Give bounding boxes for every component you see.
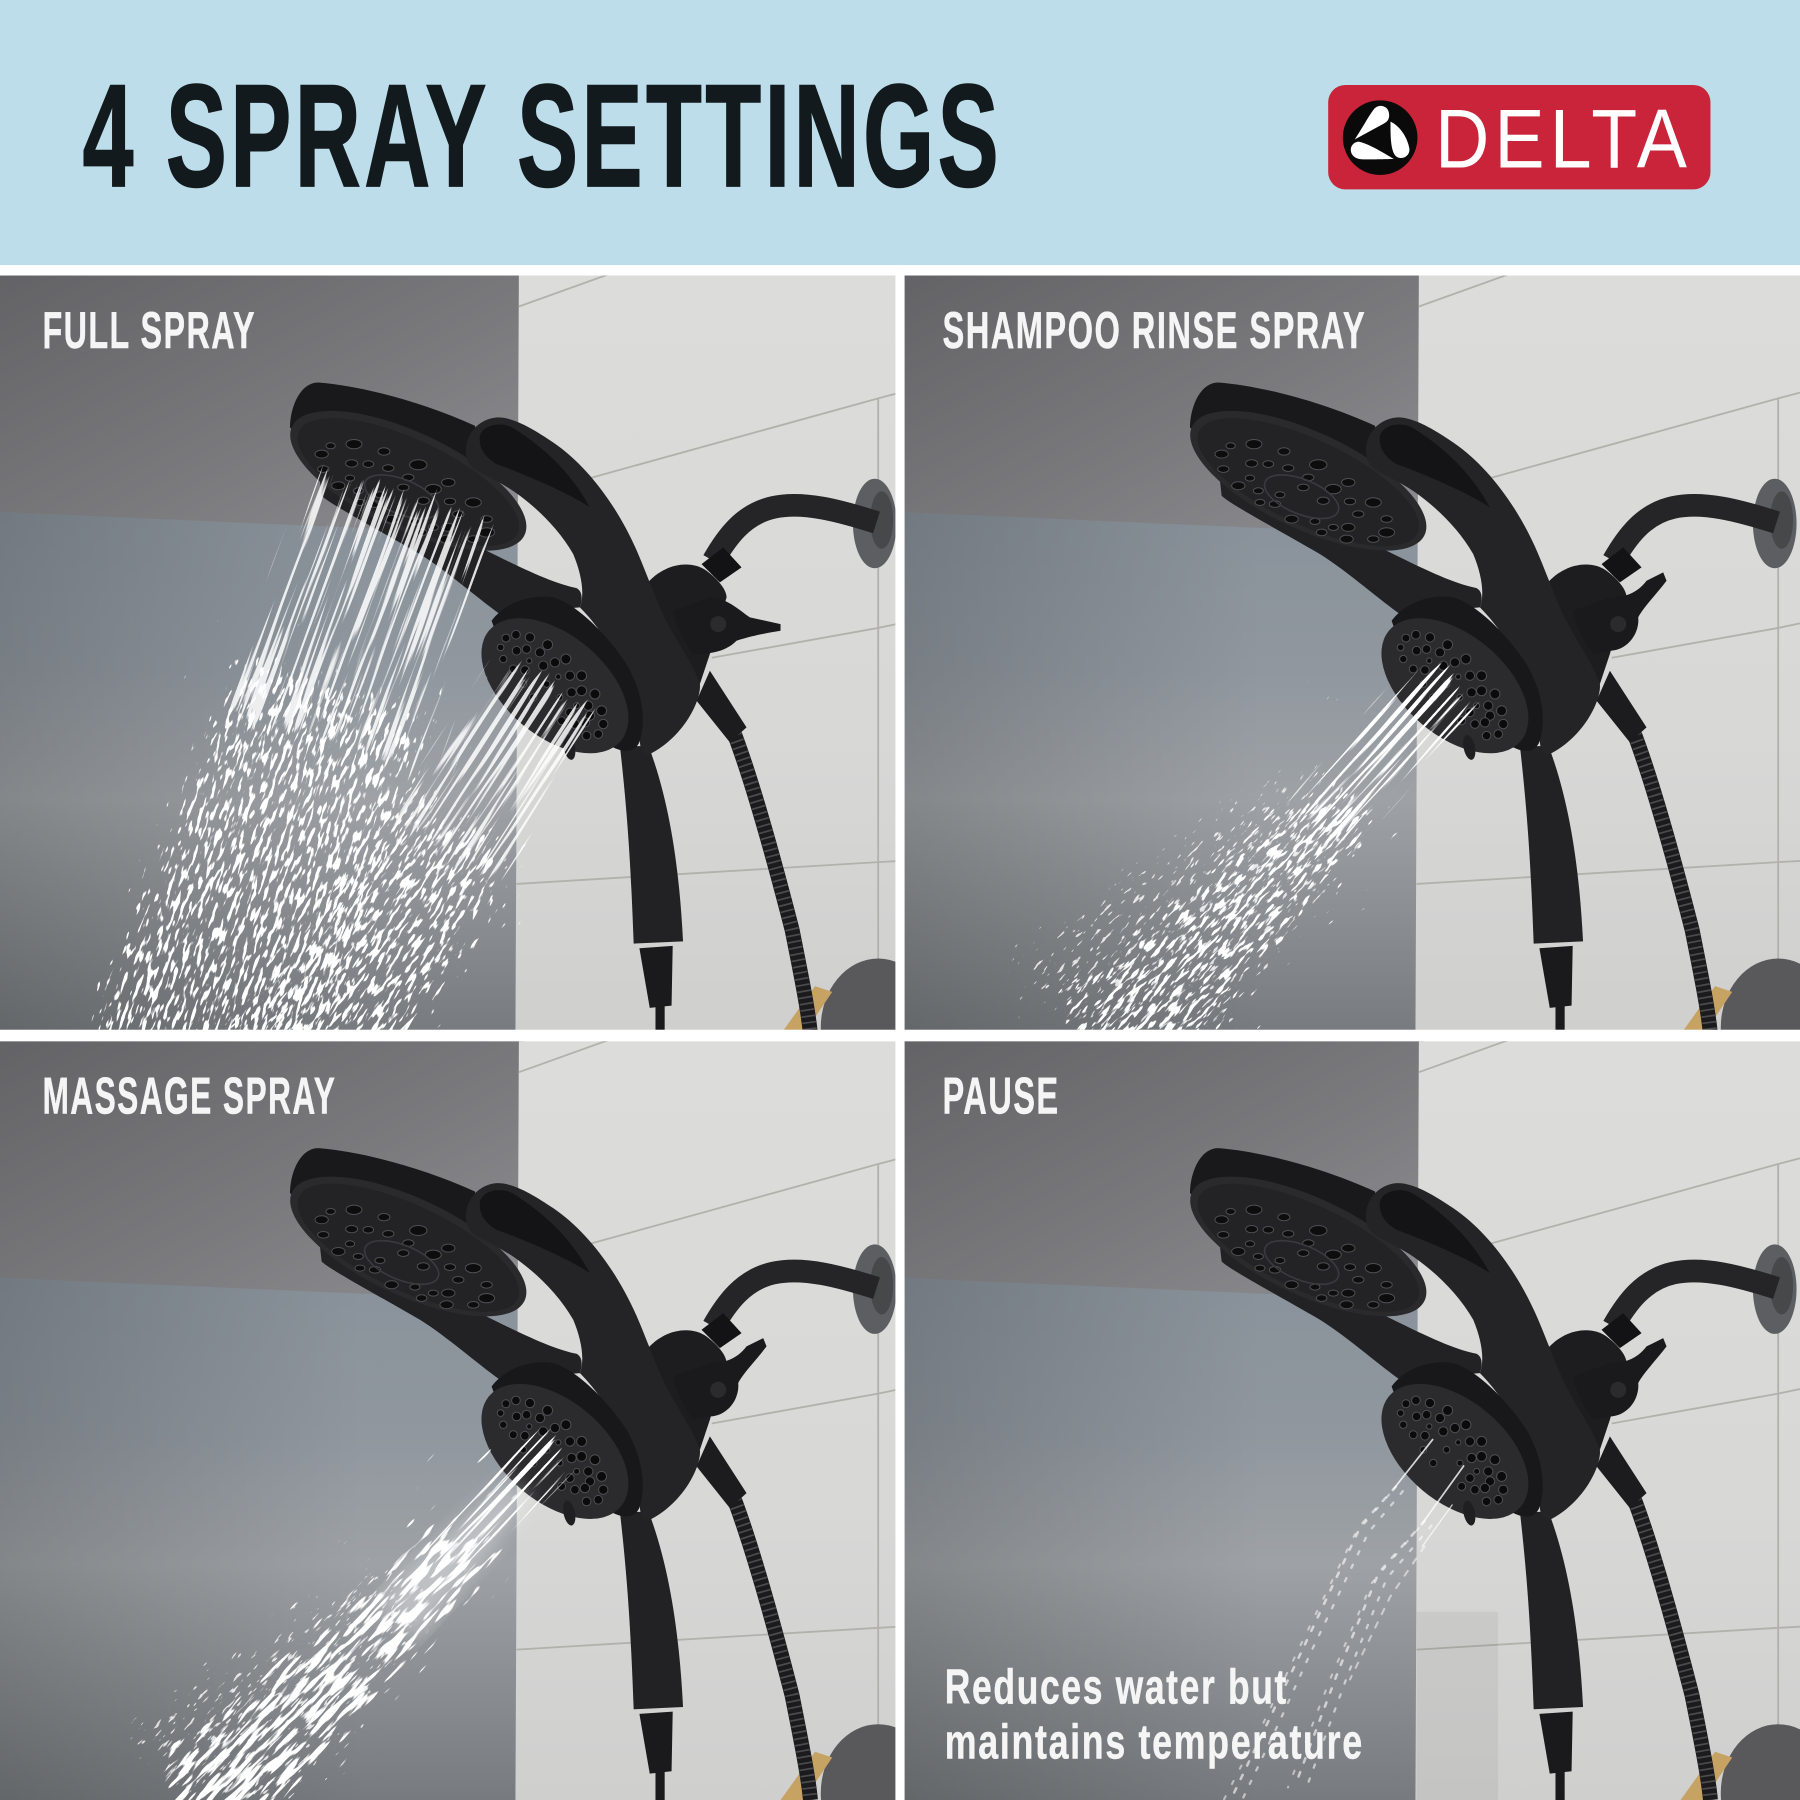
panel label: FULL SPRAY bbox=[42, 301, 256, 359]
diverter lever pointing up bbox=[1610, 1338, 1666, 1416]
water jet bbox=[1008, 662, 1480, 1030]
water spray from hand shower bbox=[221, 659, 596, 1030]
logo wordmark: DELTA bbox=[1435, 92, 1692, 186]
lower tile shadow bbox=[1417, 1612, 1498, 1800]
diverter lever pointing right bbox=[710, 601, 781, 653]
panel: pause bbox=[900, 1040, 1800, 1800]
panel label: SHAMPOO RINSE SPRAY bbox=[942, 301, 1366, 359]
shower fixture scene bbox=[900, 1040, 1800, 1800]
reduced water trickle bbox=[1224, 1440, 1464, 1800]
shower fixture scene bbox=[0, 276, 896, 1030]
logo: Delta bbox=[1328, 85, 1710, 189]
diverter lever pointing up bbox=[710, 1338, 766, 1416]
header band bbox=[0, 0, 1800, 265]
caption: Reduces water but bbox=[945, 1660, 1288, 1715]
panel: shampoo rinse spray bbox=[904, 276, 1800, 1030]
diverter lever pointing up bbox=[1610, 572, 1666, 651]
shower fixture scene bbox=[900, 274, 1800, 1096]
shower fixture scene bbox=[0, 1040, 936, 1800]
title: 4 SPRAY SETTINGS bbox=[83, 54, 1002, 217]
panel: massage spray bbox=[0, 1040, 936, 1800]
panel label: PAUSE bbox=[942, 1067, 1060, 1125]
water spray from rain head bbox=[89, 464, 498, 1030]
massage water jet bbox=[106, 1420, 586, 1800]
panel: full spray bbox=[0, 276, 896, 1030]
panel label: MASSAGE SPRAY bbox=[42, 1067, 336, 1125]
icon: Delta circular emblem bbox=[1343, 100, 1417, 175]
caption bbox=[945, 1660, 1364, 1770]
caption: maintains temperature bbox=[945, 1715, 1364, 1770]
